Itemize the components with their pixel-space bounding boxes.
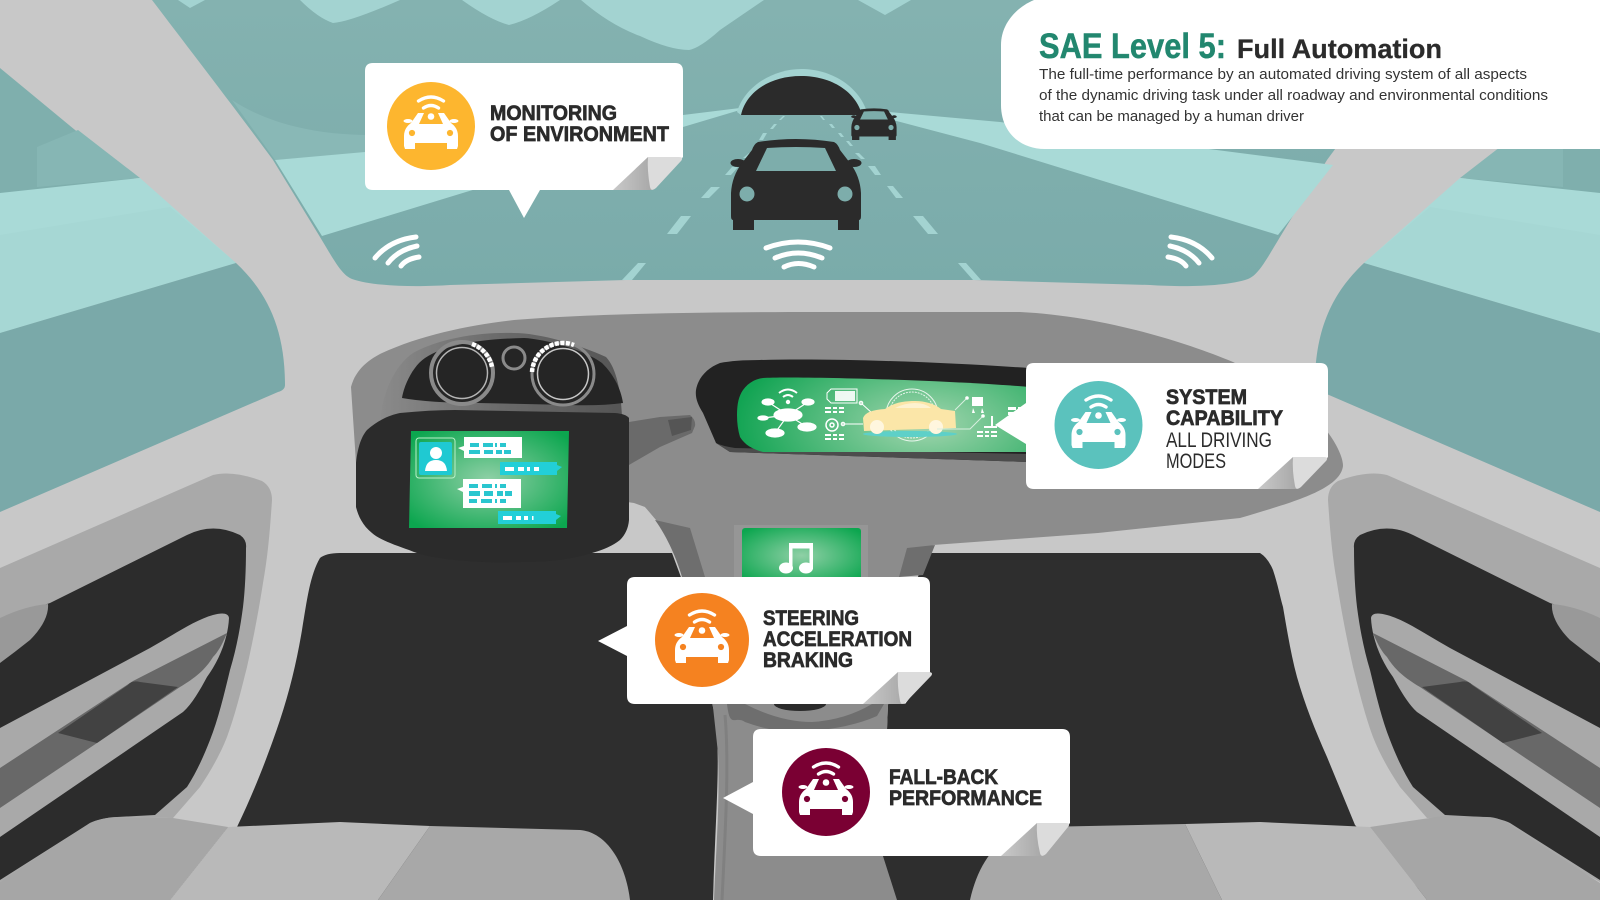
steering stalk (629, 415, 695, 465)
teal ground ellipse (863, 431, 957, 437)
left seat (0, 817, 630, 900)
title: SAE Level 5: (1039, 27, 1226, 66)
indicator ring (503, 347, 525, 369)
description (1039, 66, 1548, 125)
callout text: FALL-BACK (889, 766, 998, 789)
callout: monitoring of environment (365, 63, 683, 218)
right side window (1315, 68, 1600, 512)
callout text: OF ENVIRONMENT (490, 123, 669, 146)
icon: connected car maroon (782, 748, 870, 836)
network diagram (758, 399, 816, 437)
distant hills (178, 0, 911, 50)
green display (409, 431, 569, 528)
near hill shading (232, 100, 370, 160)
icon: wifi signal centre (766, 242, 830, 267)
callout: steering acceleration braking (598, 577, 932, 704)
callout text: ACCELERATION (763, 628, 912, 651)
description: The full-time performance by an automated driving system of all aspects (1039, 66, 1527, 83)
icon: connected car orange (655, 593, 749, 687)
road verge left (275, 108, 740, 236)
gauge right (532, 343, 594, 405)
left floor (170, 553, 718, 900)
subtitle: Full Automation (1237, 34, 1442, 64)
callout text: PERFORMANCE (889, 787, 1042, 810)
lower console recess (727, 704, 884, 732)
windshield view (152, 0, 1448, 286)
icon: connected car yellow (387, 82, 475, 170)
music panel (734, 525, 868, 585)
car scan rings (886, 389, 938, 441)
tunnel (737, 69, 867, 115)
car: small distant (851, 108, 897, 140)
binnacle black face (402, 338, 623, 405)
avatar (416, 438, 455, 478)
title panel (1001, 0, 1600, 149)
message 2 (500, 462, 562, 475)
description: of the dynamic driving task under all roadway and environmental conditions (1039, 87, 1548, 104)
icon: battery (825, 389, 857, 413)
instrument binnacle (381, 333, 623, 420)
icon: connected car teal (1054, 381, 1142, 469)
callout text: STEERING (763, 607, 859, 630)
callout text (763, 607, 912, 672)
icon: wifi signal right (1168, 237, 1212, 266)
left door (0, 473, 272, 882)
display hood (696, 359, 1029, 462)
left side window (0, 68, 285, 512)
callout text (1166, 386, 1283, 473)
gauge left (431, 342, 493, 404)
green panel (737, 377, 1029, 452)
sensor icons right (965, 396, 1024, 437)
road lane dashes (622, 116, 981, 280)
console side band right (899, 545, 935, 577)
message 1 (458, 437, 522, 458)
right seat (970, 816, 1600, 900)
dashboard (351, 312, 1343, 560)
icon: music note (779, 543, 813, 574)
car: large foreground (730, 139, 862, 230)
description: that can be managed by a human driver (1039, 108, 1304, 125)
callout text (490, 102, 669, 146)
yellow car (863, 401, 956, 434)
message 3 (457, 479, 521, 508)
right door (1328, 473, 1600, 882)
callout text: CAPABILITY (1166, 407, 1283, 430)
icon: wifi (779, 390, 797, 404)
chat screen (356, 410, 629, 562)
screen housing (356, 410, 629, 562)
callout text: MONITORING (490, 102, 617, 125)
callout text: SYSTEM (1166, 386, 1247, 409)
icon: brake disc (825, 401, 872, 440)
centre console (645, 507, 935, 900)
callout text: ALL DRIVING (1166, 429, 1272, 452)
callout: fall-back performance (723, 729, 1070, 856)
sensor lines right (937, 398, 983, 429)
display lower rim (716, 443, 1029, 462)
callout text: BRAKING (763, 649, 853, 672)
icon: wifi signal left (375, 237, 419, 266)
right floor (882, 553, 1430, 900)
callout text: MODES (1166, 450, 1226, 473)
callout: system capability (995, 363, 1328, 489)
callout text (889, 766, 1042, 810)
vehicle status display (696, 359, 1029, 462)
message 4 (498, 511, 561, 524)
road verge right (866, 110, 1333, 235)
console side band left (655, 520, 705, 577)
